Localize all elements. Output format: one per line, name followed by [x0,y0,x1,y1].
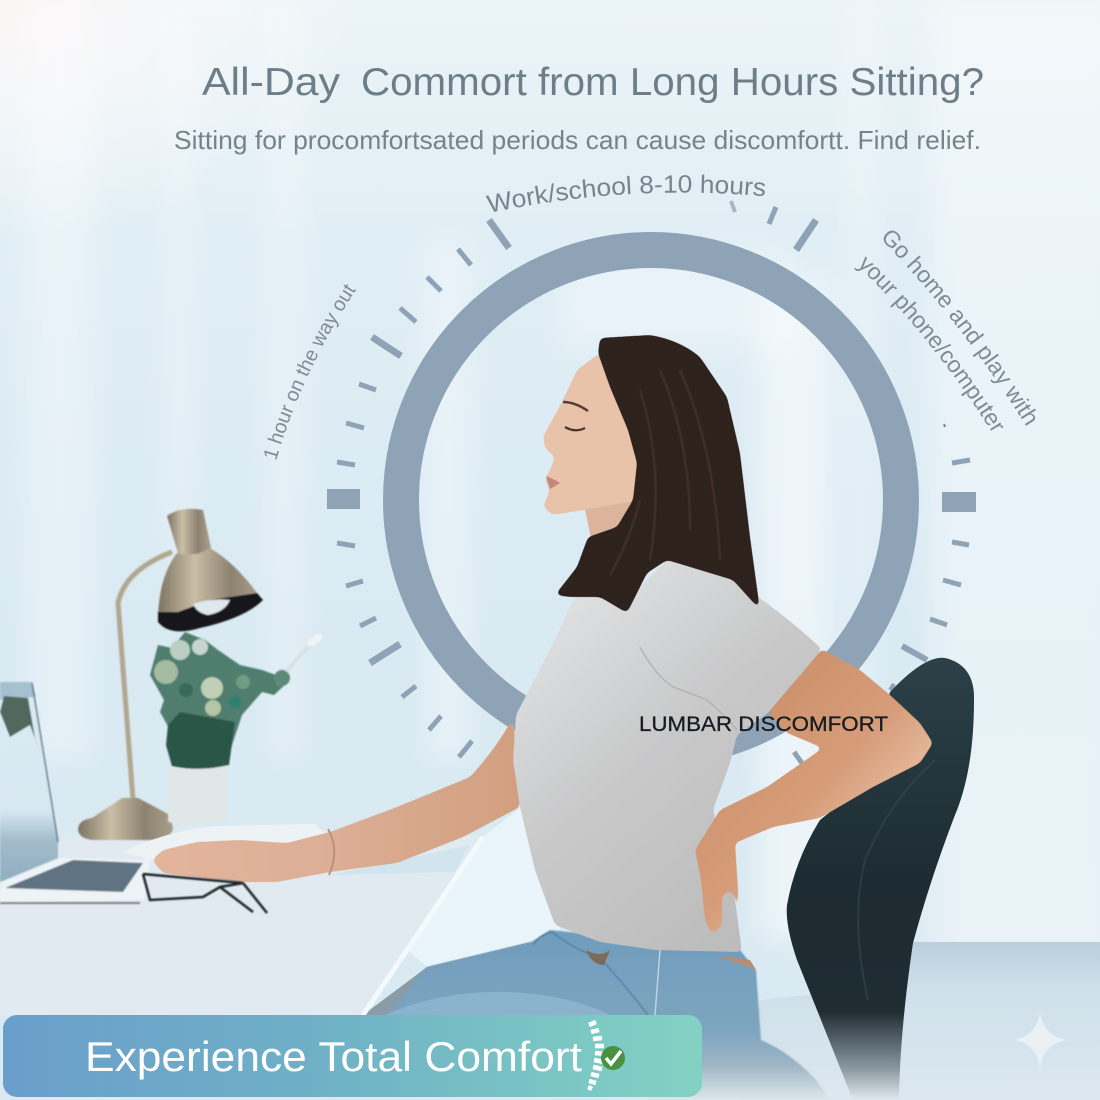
icon: sparkle [1014,1013,1066,1067]
lips [546,476,560,489]
desk [0,828,483,1015]
jeans [385,930,830,1100]
laptop [0,682,150,903]
bright area beside desk [407,800,560,967]
collar [573,553,617,598]
chair [787,658,974,1100]
icon: spine [588,1022,605,1089]
glasses [143,874,267,913]
label: way out: 1 hour on the way out [264,284,356,460]
icon: green check [601,1046,625,1070]
pot [168,765,227,825]
clock tick marks [327,201,976,766]
bottom banner [3,1015,702,1097]
label: phone/computer: your phone/computer [854,256,1004,431]
label: go home: Go home and play with [884,230,1036,426]
front arm and hand [152,718,520,882]
banner background [3,1015,702,1097]
lumbar discomfort label: LUMBAR DISCOMFORT [639,712,888,736]
floor [740,942,1100,1100]
title start: All-Day [202,61,341,104]
title rest: Commort from Long Hours Sitting? [361,61,984,104]
bracelet [328,829,334,875]
back arm and hand [695,649,933,935]
woman [152,335,933,1100]
shirt [513,560,822,952]
papers on desk [122,824,330,860]
eye [565,427,585,430]
sleeve seam [640,647,737,730]
title [202,61,984,104]
neck [583,500,635,590]
banner text: Experience Total Comfort [85,1033,582,1080]
gap under desk [363,942,540,1015]
subtitle: Sitting for procomfortsated periods can cause discomfortt. Find relief. [174,125,981,155]
potted plant [150,632,325,825]
foliage [150,632,325,769]
eyebrow [563,402,588,411]
clock ring [401,250,901,750]
face [543,353,640,515]
desk lamp [78,509,263,840]
label: work/school: Work/school 8-10 hours [486,174,765,212]
hair [555,335,760,613]
